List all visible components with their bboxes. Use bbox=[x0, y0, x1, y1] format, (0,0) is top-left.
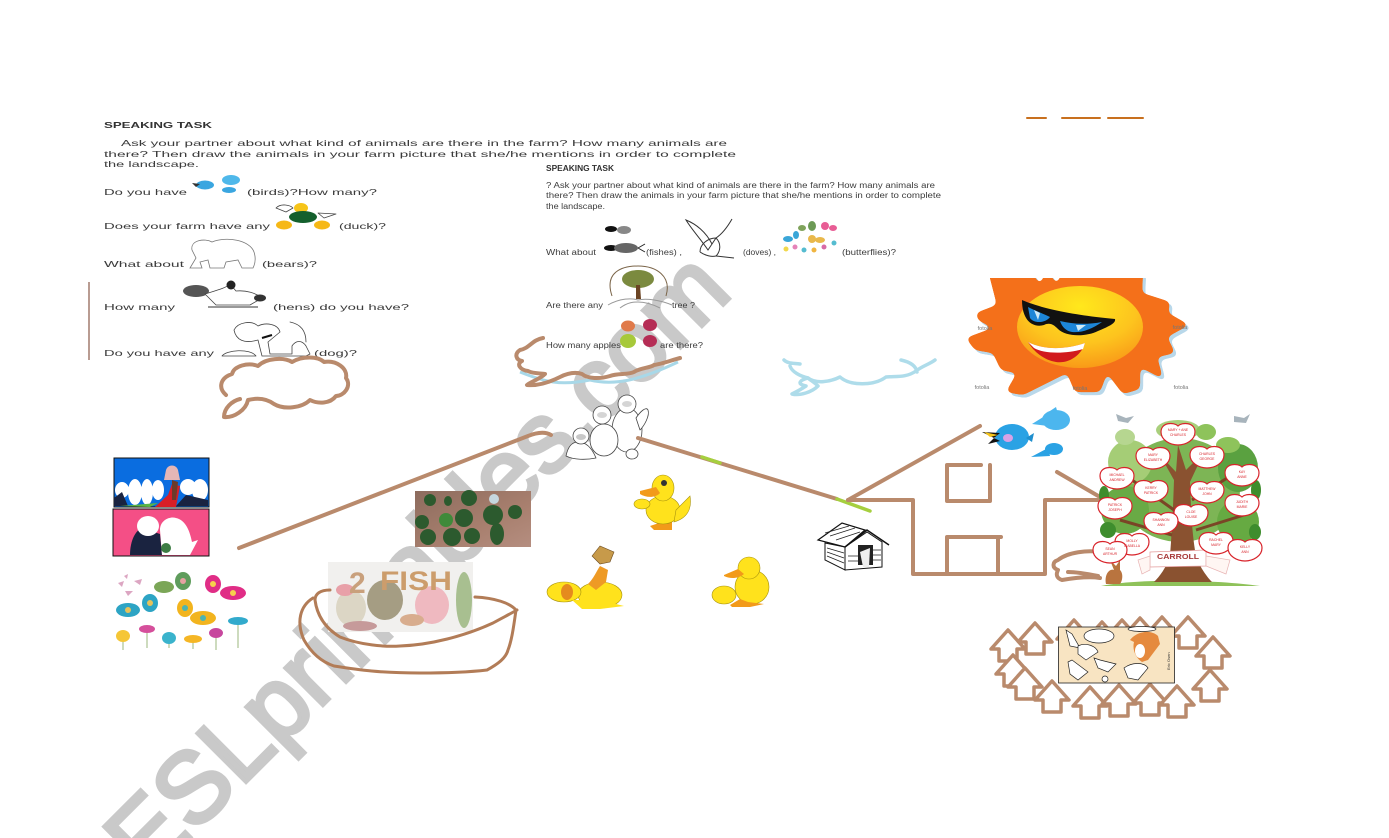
right questions: How many apples bbox=[546, 341, 621, 350]
banner bbox=[1138, 550, 1230, 574]
mouth bbox=[1028, 342, 1085, 362]
left instructions: the landscape. bbox=[104, 159, 199, 169]
heart labels: MARY + ANE bbox=[1168, 428, 1189, 432]
heart labels: SEAN bbox=[1105, 547, 1115, 551]
fish book cover bbox=[328, 562, 473, 632]
heart labels: KELLY bbox=[1240, 545, 1251, 549]
left questions: Do you have any bbox=[104, 348, 215, 358]
left questions: (bears)? bbox=[262, 259, 317, 269]
door bbox=[947, 537, 1001, 574]
upper bird bbox=[1032, 407, 1070, 430]
fotolia watermarks: fotolia bbox=[1173, 325, 1188, 331]
rabbit outline bbox=[1054, 551, 1100, 580]
heart labels: CLOE bbox=[1186, 510, 1196, 514]
left questions: (dog)? bbox=[314, 348, 357, 358]
loud bird bbox=[982, 424, 1034, 450]
butterflies and flowers bbox=[116, 572, 248, 650]
heart labels: MARIE bbox=[1237, 505, 1248, 509]
stray vertical rule bbox=[88, 282, 90, 360]
heart labels: ARTHUR bbox=[1103, 552, 1118, 556]
left questions bbox=[104, 187, 409, 358]
standing duck bbox=[634, 475, 690, 530]
heart labels: KAY bbox=[1239, 470, 1246, 474]
sun with sunglasses bbox=[966, 270, 1192, 398]
heart labels: ANN bbox=[1157, 523, 1165, 527]
right instructions: the landscape. bbox=[546, 202, 605, 211]
fish book cover: FISH bbox=[380, 566, 452, 596]
foliage bbox=[1099, 420, 1261, 544]
left instructions: Ask your partner about what kind of animals are there in the farm? How many animals are bbox=[121, 138, 727, 148]
lying duck with rider bbox=[547, 546, 624, 609]
right instructions: ? Ask your partner about what kind of animals are there in the farm? How many animals are bbox=[546, 181, 936, 190]
house outline bbox=[848, 472, 1100, 574]
butterflies bbox=[116, 572, 246, 625]
heart labels: ANN bbox=[1241, 550, 1249, 554]
wedding bears picture: church bbox=[114, 458, 209, 507]
icon: small butterflies and flowers bbox=[783, 221, 837, 252]
heart labels: CHARLES bbox=[1199, 452, 1216, 456]
heart labels: PATRICK bbox=[1108, 503, 1123, 507]
trunk bbox=[1154, 445, 1212, 582]
right questions: (fishes) , bbox=[646, 248, 682, 257]
left speaking task text block bbox=[104, 120, 736, 358]
icon: small birds bbox=[192, 175, 240, 193]
tree models picture bbox=[415, 490, 531, 547]
house drawing bbox=[239, 426, 1100, 574]
flowers bbox=[116, 617, 248, 650]
right questions: (doves) , bbox=[743, 248, 776, 257]
left questions: Does your farm have any bbox=[104, 221, 271, 231]
left long roof line bbox=[239, 433, 551, 548]
left instructions: there? Then draw the animals in your farm picture that she/he mentions in order to complete bbox=[104, 149, 736, 159]
top-right orange dashes bbox=[1027, 117, 1143, 119]
left heading: SPEAKING TASK bbox=[104, 120, 213, 130]
right questions: (butterflies)? bbox=[842, 248, 897, 257]
right questions: tree ? bbox=[672, 301, 696, 310]
left instructions bbox=[104, 138, 736, 169]
icon: fishes bbox=[604, 226, 645, 253]
heart labels: JOSEPH bbox=[1108, 508, 1122, 512]
heart labels: MARY bbox=[1148, 453, 1159, 457]
heart labels bbox=[1103, 428, 1251, 556]
sun shadow bbox=[969, 273, 1192, 398]
right questions: Are there any bbox=[546, 301, 603, 310]
roof left bbox=[848, 426, 980, 500]
banner: CARROLL bbox=[1157, 552, 1199, 561]
large bear bbox=[612, 395, 648, 459]
left questions: (birds)?How many? bbox=[247, 187, 377, 197]
right instructions bbox=[546, 181, 942, 211]
icon: dove bbox=[686, 219, 734, 258]
right speaking task text block bbox=[546, 164, 942, 350]
left questions: (hens) do you have? bbox=[273, 302, 409, 312]
sun rays bbox=[966, 270, 1189, 395]
icon: tree with roots bbox=[608, 266, 672, 308]
bears family bbox=[566, 395, 648, 459]
bird trio bbox=[982, 407, 1070, 457]
right questions bbox=[546, 248, 897, 350]
fotolia watermarks: fotolia bbox=[1174, 385, 1189, 391]
left questions: (duck)? bbox=[339, 221, 386, 231]
fotolia watermarks: fotolia bbox=[1073, 386, 1088, 392]
left questions: What about bbox=[104, 259, 185, 269]
heart labels: KERRY bbox=[1145, 486, 1158, 490]
heart labels: RACHEL bbox=[1209, 538, 1223, 542]
lower bird bbox=[1031, 443, 1063, 457]
small birds bbox=[1116, 414, 1250, 423]
heart labels: ANDREW bbox=[1109, 478, 1125, 482]
heart labels: SHANNON bbox=[1153, 518, 1170, 522]
icon: hens bbox=[183, 280, 266, 307]
heart labels: MICHAEL bbox=[1109, 473, 1125, 477]
boat bbox=[300, 590, 517, 673]
heart labels: ELIZABETH bbox=[1144, 458, 1163, 462]
duck with chick bbox=[712, 557, 769, 607]
icon: cartoon duck bbox=[276, 203, 336, 230]
heart labels: ANNE bbox=[1237, 475, 1247, 479]
hens and fox cartoon: Eric Osen bbox=[1166, 652, 1171, 670]
right instructions: there? Then draw the animals in your farm picture that she/he mentions in order to complete bbox=[546, 191, 942, 200]
fotolia watermarks: fotolia bbox=[975, 385, 990, 391]
wedding bears picture: couple bbox=[113, 509, 209, 556]
heart labels: ISABELLA bbox=[1124, 544, 1141, 548]
small bear bbox=[566, 428, 596, 459]
heart labels: MOLLY bbox=[1126, 539, 1138, 543]
hens and fox cartoon bbox=[1058, 626, 1174, 683]
middle bear bbox=[590, 406, 618, 456]
fish book cover: 2 bbox=[349, 567, 366, 600]
thought cloud: left bbox=[221, 358, 348, 417]
icon: dog with bowl bbox=[222, 322, 310, 356]
heart labels: MARY bbox=[1211, 543, 1222, 547]
left questions: Do you have bbox=[104, 187, 187, 197]
heart labels: CHARLES bbox=[1170, 433, 1187, 437]
heart labels: JOHN bbox=[1202, 492, 1212, 496]
icon: apples bbox=[620, 319, 657, 348]
fotolia watermarks: fotolia bbox=[978, 326, 993, 332]
rabbit bbox=[1106, 560, 1122, 584]
left questions: How many bbox=[104, 302, 176, 312]
icon: elephant-like bear outline bbox=[190, 239, 255, 268]
green highlight strokes bbox=[702, 457, 870, 511]
kennel bbox=[818, 523, 889, 570]
hens and speech bubbles bbox=[1066, 626, 1156, 682]
fotolia watermarks bbox=[975, 325, 1189, 392]
right questions: What about bbox=[546, 248, 597, 257]
thought cloud: middle bbox=[516, 338, 680, 385]
light blue cloud bbox=[784, 360, 935, 395]
sun face bbox=[1017, 286, 1143, 368]
window bbox=[947, 465, 990, 501]
heart labels: LOUISE bbox=[1185, 515, 1198, 519]
right questions: are there? bbox=[660, 341, 704, 350]
ring of arrows bbox=[991, 617, 1230, 718]
heart labels: GEORGE bbox=[1200, 457, 1215, 461]
crowd of bears bbox=[115, 479, 208, 505]
ground bbox=[1101, 581, 1260, 586]
heart name tags bbox=[1093, 424, 1262, 563]
heart labels: MATTHEW bbox=[1199, 487, 1216, 491]
right heading: SPEAKING TASK bbox=[546, 164, 614, 173]
heart labels: JUDITH bbox=[1236, 500, 1249, 504]
sunglasses bbox=[1022, 300, 1115, 335]
fox bbox=[1130, 632, 1160, 662]
heart labels: PATRICK bbox=[1144, 491, 1159, 495]
right long roof line bbox=[638, 438, 837, 499]
family tree bbox=[1054, 414, 1262, 586]
